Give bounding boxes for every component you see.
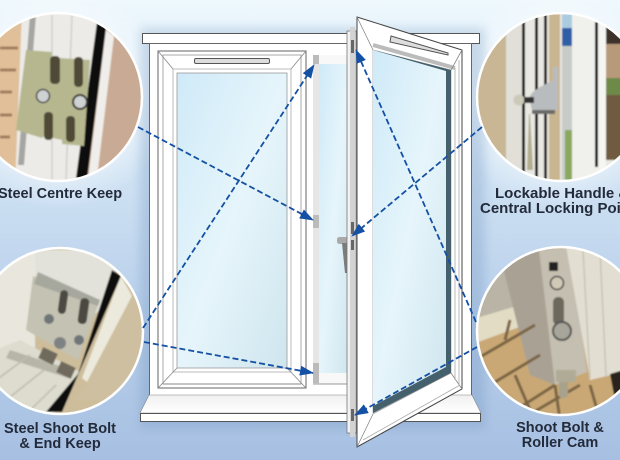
arrow: centre keep [138, 127, 313, 220]
arrow: roller cam bottom [355, 347, 477, 415]
label: shoot bolt and roller cam [516, 420, 604, 451]
casement edge with locking strip [347, 27, 356, 437]
arrow: shoot bolt top [143, 65, 314, 328]
locking strip [562, 45, 572, 180]
label: shoot bolt and roller cam: Roller Cam [522, 435, 598, 451]
window illustration [140, 17, 485, 447]
keep plate [16, 50, 90, 146]
photo: shoot bolt and roller cam [476, 246, 620, 416]
dashed arrows [138, 50, 482, 415]
arrow: handle [352, 127, 482, 236]
label: steel shoot bolt and end keep: Steel Shoot Bolt [4, 421, 116, 437]
sash uPVC [566, 246, 620, 380]
label: steel shoot bolt and end keep: & End Keep [19, 436, 101, 452]
casement vent [390, 36, 448, 55]
photo: lockable handle and central locking point [470, 10, 620, 185]
window sill [140, 395, 481, 422]
handle [529, 67, 558, 110]
open casement sash [357, 17, 462, 447]
top head board [142, 34, 480, 44]
opening behind the casement [313, 55, 349, 384]
label: steel centre keep: Steel Centre Keep [0, 186, 122, 202]
label: lockable handle and central locking point [480, 185, 620, 217]
photo: steel shoot bolt and end keep [0, 246, 144, 416]
outer frame [150, 44, 472, 396]
lock plate [539, 247, 587, 385]
casement glass [373, 50, 446, 406]
arrow: shoot bolt bottom [144, 342, 313, 373]
photo: steel centre keep [0, 10, 150, 185]
label: steel shoot bolt and end keep [4, 421, 116, 452]
left fixed sash [158, 51, 306, 388]
garden view [605, 42, 620, 80]
brick mortar lines [482, 319, 598, 414]
label: shoot bolt and roller cam: Shoot Bolt & [516, 420, 604, 436]
window handle [337, 237, 348, 273]
top vent [194, 58, 270, 64]
arrow: roller cam top [356, 50, 476, 322]
